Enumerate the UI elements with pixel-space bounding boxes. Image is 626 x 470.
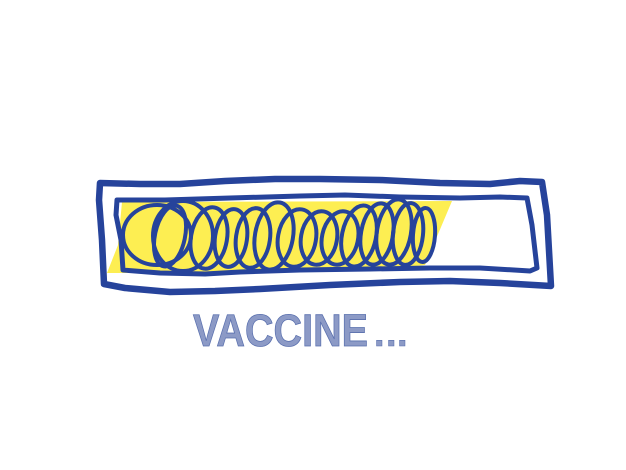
yellow progress fill [107, 201, 452, 273]
inner bar frame [116, 195, 537, 274]
label: VACCINE: VACCINE [193, 305, 368, 356]
outer bar frame [99, 179, 551, 292]
scribble coil [123, 197, 437, 273]
label: ellipsis: ... [374, 313, 408, 355]
